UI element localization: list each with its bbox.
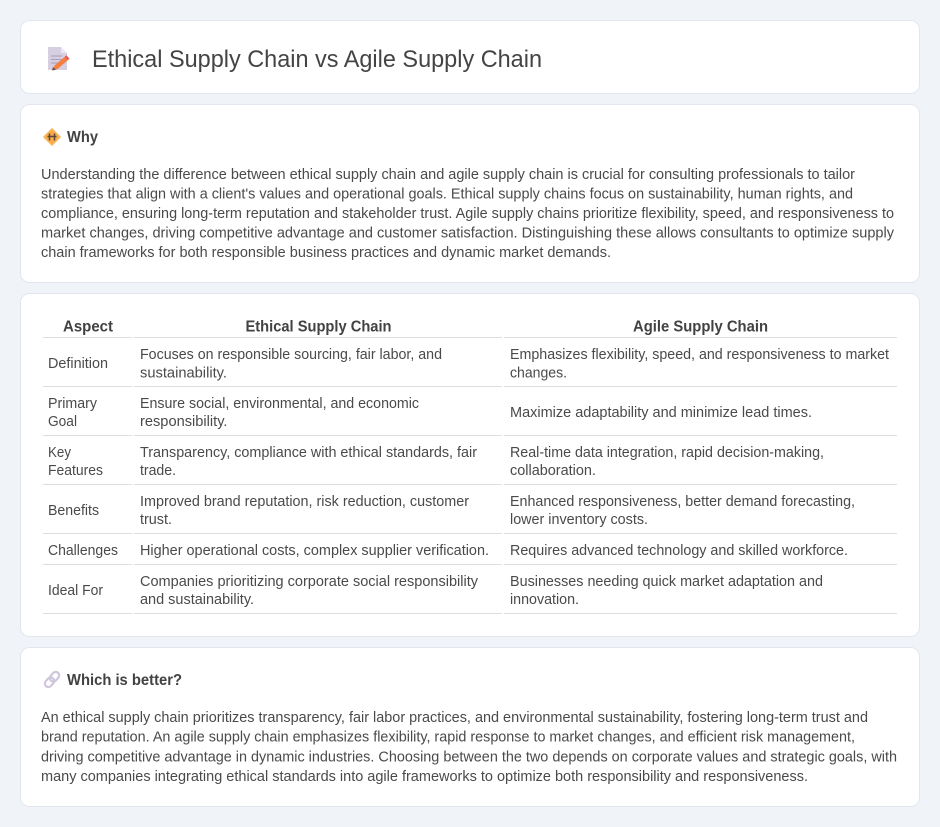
row: definition: Focuses on responsible sourcing, fair labor, and bbox=[140, 347, 442, 363]
row: benefits bbox=[48, 494, 855, 528]
which is better text block: brand reputation. An agile supply chain emphasizes flexibility, rapid response to market changes, and efficient risk management, bbox=[41, 730, 855, 746]
table header bbox=[63, 318, 768, 336]
row: definition bbox=[48, 347, 889, 382]
why text block: market changes, driving competitive advantage and customer satisfaction. Distinguishing these allows consultants to optimize supply bbox=[41, 226, 895, 242]
title heading: Ethical Supply Chain vs Agile Supply Chain bbox=[92, 46, 542, 73]
row: primary goal: Primary bbox=[48, 396, 98, 412]
row: ideal for bbox=[48, 574, 823, 608]
panel: why bbox=[20, 104, 920, 282]
row: primary goal bbox=[48, 396, 812, 430]
which is better text block: many companies integrating ethical standards into agile frameworks to optimize both responsibility and responsiveness. bbox=[41, 769, 808, 785]
which is better text block: An ethical supply chain prioritizes transparency, fair labor practices, and environmental sustainability, fostering long-term trust and bbox=[41, 710, 868, 726]
row: definition: Emphasizes flexibility, speed, and responsiveness to market bbox=[510, 347, 889, 363]
row: key features: Key bbox=[48, 445, 72, 461]
row: ideal for: and sustainability. bbox=[140, 592, 254, 608]
row: key features bbox=[48, 445, 824, 479]
row: definition: sustainability. bbox=[140, 366, 227, 382]
which is better heading: Which is better? bbox=[67, 672, 182, 689]
why text block: compliance, ensuring long-term reputation and stakeholder trust. Agile supply chains prioritize flexibility, speed, and responsiveness to bbox=[41, 206, 894, 222]
row: ideal for: Ideal For bbox=[48, 583, 103, 599]
row: challenges: Higher operational costs, complex supplier verification. bbox=[140, 543, 489, 559]
which is better text block bbox=[41, 710, 897, 785]
why text block bbox=[41, 167, 895, 261]
row: key features: trade. bbox=[140, 463, 176, 479]
row: ideal for: Businesses needing quick market adaptation and bbox=[510, 574, 823, 590]
row: key features: collaboration. bbox=[510, 463, 596, 479]
panel: which is better bbox=[20, 648, 920, 806]
row: benefits: Benefits bbox=[48, 503, 99, 519]
row: benefits: lower inventory costs. bbox=[510, 512, 648, 528]
row: key features: Transparency, compliance with ethical standards, fair bbox=[140, 445, 477, 461]
icon: chain link bbox=[43, 670, 61, 689]
row: key features: Features bbox=[48, 463, 103, 479]
row: benefits: Enhanced responsiveness, better demand forecasting, bbox=[510, 494, 855, 510]
why heading: Why bbox=[67, 129, 98, 146]
table header: Agile Supply Chain bbox=[633, 318, 768, 336]
row: primary goal: Goal bbox=[48, 414, 77, 430]
row: challenges: Requires advanced technology and skilled workforce. bbox=[510, 543, 848, 559]
icon: caution diamond bbox=[44, 128, 60, 146]
why text block: chain frameworks for both responsible business practices and dynamic market demands. bbox=[41, 245, 611, 261]
icon: memo and pencil bbox=[48, 47, 70, 70]
row: ideal for: Companies prioritizing corporate social responsibility bbox=[140, 574, 479, 590]
row: benefits: Improved brand reputation, risk reduction, customer bbox=[140, 494, 469, 510]
row: ideal for: innovation. bbox=[510, 592, 579, 608]
row: primary goal: Maximize adaptability and minimize lead times. bbox=[510, 405, 812, 421]
which is better text block: driving competitive advantage in dynamic industries. Choosing between the two depends on corporate values and strategic goals, with bbox=[41, 750, 897, 766]
why text block: Understanding the difference between ethical supply chain and agile supply chain is crucial for consulting professionals to tailor bbox=[41, 167, 855, 183]
row: primary goal: Ensure social, environmental, and economic bbox=[140, 396, 419, 412]
row: definition: Definition bbox=[48, 356, 108, 372]
row: primary goal: responsibility. bbox=[140, 414, 228, 430]
panel: comparison table bbox=[20, 294, 920, 636]
row: key features: Real-time data integration, rapid decision-making, bbox=[510, 445, 824, 461]
row: challenges: Challenges bbox=[48, 543, 118, 559]
row: definition: changes. bbox=[510, 366, 567, 382]
panel: title bbox=[20, 20, 920, 94]
row: benefits: trust. bbox=[140, 512, 172, 528]
row: challenges bbox=[48, 543, 848, 559]
table header: Aspect bbox=[63, 318, 114, 336]
table header: Ethical Supply Chain bbox=[246, 318, 392, 336]
why text block: strategies that align with a client's values and operational goals. Ethical supply chains focus on sustainability, human rights, and bbox=[41, 186, 853, 202]
